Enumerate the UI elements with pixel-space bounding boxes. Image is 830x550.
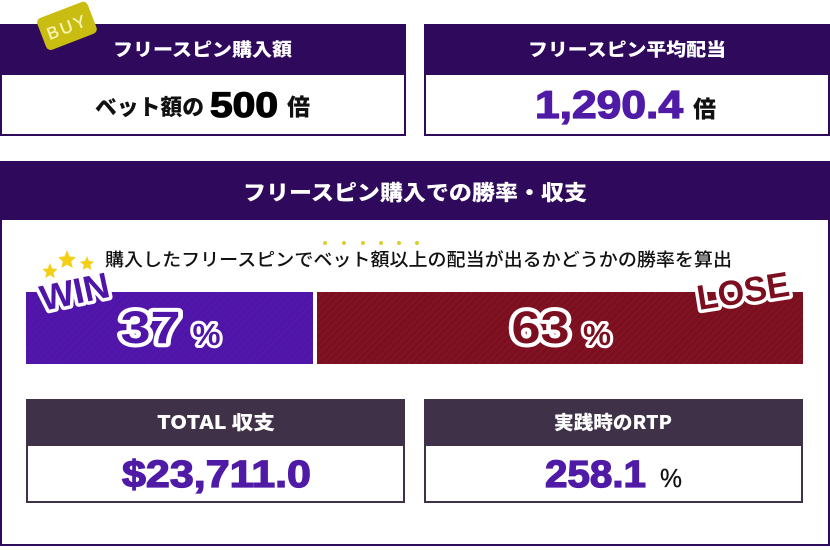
value: 258.1%: 258.1 <box>545 454 646 496</box>
panel: free spin average payout <box>424 24 830 135</box>
emphasis dots <box>323 241 419 245</box>
heading: free spin buy price: フリースピン購入額 <box>113 36 292 62</box>
value: bet 500x: ベット額の <box>95 90 204 122</box>
panel: free spin buy price <box>0 24 406 135</box>
value: 258.1%: % <box>660 463 682 493</box>
description text: 購入したフリースピンでベット額以上の配当が出るかどうかの勝率を算出 <box>105 246 732 272</box>
icon: stars <box>42 250 94 278</box>
label: WIN: WIN <box>36 264 113 319</box>
value: 1,290.4x: 倍 <box>693 90 716 124</box>
icon: BUY tag: BUY <box>44 11 91 44</box>
bar: lose 63% <box>317 292 803 364</box>
panel: total balance <box>26 399 405 502</box>
label: 37% <box>120 302 220 353</box>
heading: realized RTP: 実践時のRTP <box>554 408 672 435</box>
value: 1,290.4x: 1,290.4 <box>535 84 683 127</box>
value: bet 500x: 500 <box>210 86 278 125</box>
value: bet 500x <box>95 86 310 125</box>
panel: win rate and balance <box>0 161 830 545</box>
icon: BUY tag <box>36 0 98 51</box>
value: bet 500x: 倍 <box>287 88 310 122</box>
label: 37%: 37 <box>120 302 180 353</box>
heading: win rate and balance: フリースピン購入での勝率・収支 <box>243 177 587 207</box>
label: 63% <box>512 302 611 353</box>
label: LOSE: LOSE <box>694 265 792 318</box>
heading: total balance: TOTAL 収支 <box>157 408 275 435</box>
value: $23,711.0: $23,711.0 <box>122 454 311 496</box>
label: 37%: % <box>192 317 220 352</box>
label: 63%: 63 <box>512 302 570 353</box>
panel: realized RTP <box>424 399 803 502</box>
value: 258.1% <box>545 454 682 496</box>
bar: win 37% <box>26 292 313 364</box>
label: 63%: % <box>583 317 611 352</box>
heading: free spin average payout: フリースピン平均配当 <box>528 36 726 62</box>
